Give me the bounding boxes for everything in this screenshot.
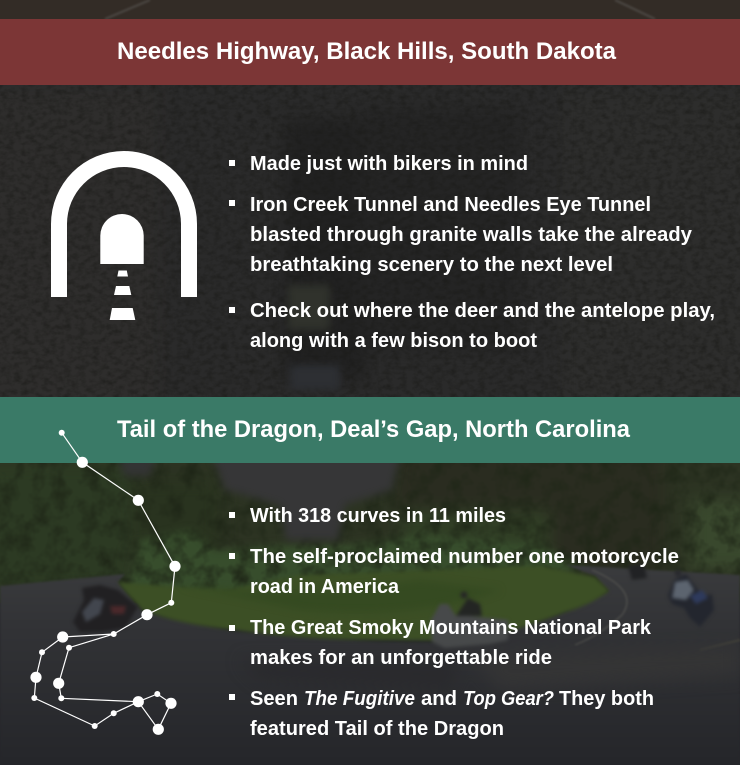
bullet list: Needles Highway: blasted through granite walls take the already	[250, 224, 693, 246]
bullet list: Tail of the Dragon: makes for an unforgettable ride	[250, 647, 552, 669]
bullet list: Needles Highway: along with a few bison to boot	[250, 330, 537, 352]
bullet list: Tail of the Dragon: The Fugitive	[304, 688, 415, 710]
bullet list: Needles Highway: Iron Creek Tunnel and Needles Eye Tunnel	[250, 194, 651, 216]
top road strip background	[0, 0, 740, 19]
heading bar: Tail of the Dragon	[0, 397, 740, 463]
bullet list: Tail of the Dragon	[229, 505, 679, 740]
road shadows	[604, 658, 648, 669]
grass verge	[118, 566, 609, 641]
bullet list: Needles Highway: breathtaking scenery to the next level	[250, 254, 613, 276]
icon: tunnel with road	[51, 151, 197, 320]
bullet list: Needles Highway: Check out where the deer and the antelope play,	[250, 300, 715, 322]
bullet list: Tail of the Dragon: The self-proclaimed number one motorcycle	[250, 546, 679, 568]
panel background: tunnel rock photo	[223, 106, 554, 390]
bullet list: Tail of the Dragon: Top Gear?	[463, 688, 554, 710]
bullet list: Needles Highway	[229, 153, 715, 352]
heading bar: Needles Highway: Needles Highway, Black Hills, South Dakota	[117, 38, 617, 65]
bullet list: Tail of the Dragon: They both	[559, 688, 654, 710]
icon: dragon constellation	[30, 430, 181, 735]
bullet list: Needles Highway: Made just with bikers in mind	[250, 153, 528, 175]
bullet list: Tail of the Dragon: road in America	[250, 576, 400, 598]
bullet list: Tail of the Dragon: Seen	[250, 688, 298, 710]
bullet list: Tail of the Dragon: The Great Smoky Mountains National Park	[250, 617, 652, 639]
bullet list: Tail of the Dragon: featured Tail of the Dragon	[250, 718, 504, 740]
bullet list: Tail of the Dragon: and	[421, 688, 457, 710]
panel background: winding road photo	[0, 463, 740, 711]
road markings	[575, 570, 627, 645]
motorcycles	[73, 564, 714, 648]
bullet list: Tail of the Dragon: With 318 curves in 11 miles	[250, 505, 506, 527]
roads	[0, 565, 740, 671]
trees and sky	[0, 463, 740, 590]
heading bar: Tail of the Dragon: Tail of the Dragon, Deal’s Gap, North Carolina	[117, 416, 631, 443]
heading bar: Needles Highway	[0, 19, 740, 85]
